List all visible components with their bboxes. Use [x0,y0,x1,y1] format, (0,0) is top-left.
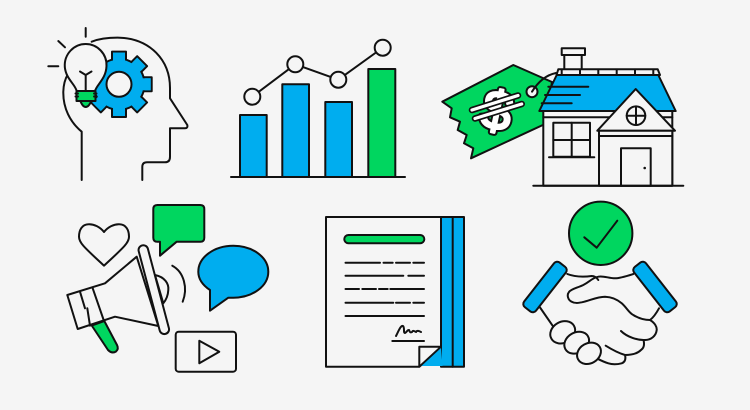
icon: signed contract [326,217,464,367]
icon: handshake with check [522,202,678,368]
round window [627,106,645,125]
left cuff [522,260,568,314]
roof ridge [556,69,660,75]
folded corner [419,347,441,367]
icon: price tag and house [442,48,683,186]
light rays [48,28,86,66]
bar and line chart [231,40,405,177]
baseline [231,176,405,178]
icon: megaphone with social symbols [67,205,268,372]
tag hole and string [526,86,538,97]
gable [597,89,675,131]
text lines [346,263,424,316]
trend line [252,48,383,97]
blue back pages [441,217,464,367]
page [326,217,441,367]
blue speech bubble [198,246,268,311]
ground line [533,185,683,187]
house walls [543,111,672,186]
video player [176,332,236,372]
sound dome [155,275,168,303]
dollar sign: $ [476,79,518,143]
bars [240,115,267,177]
price tag [442,65,552,158]
fingers [546,317,605,368]
icon: megaphone [67,250,168,352]
icon: heart [79,224,129,266]
green speech bubble [153,205,204,256]
head outline [63,38,187,180]
hands [539,274,598,327]
play triangle [199,341,219,363]
bell rim [143,250,164,329]
cone [67,257,158,329]
signature [396,326,421,336]
icon: head with gear and light bulb [48,28,187,180]
dollar sign: $ [476,79,518,143]
check mark [584,221,617,248]
chimney [562,48,585,70]
icon: gear [86,52,152,117]
right cuff [632,260,678,314]
blue corner behind fold [420,348,442,366]
sound wave [172,266,185,302]
window [553,123,590,157]
icon: light bulb [65,44,107,107]
check badge [569,202,632,265]
roof [539,75,676,111]
handle [92,321,118,352]
title bar [344,235,424,243]
door [621,148,651,186]
data points [244,40,391,105]
